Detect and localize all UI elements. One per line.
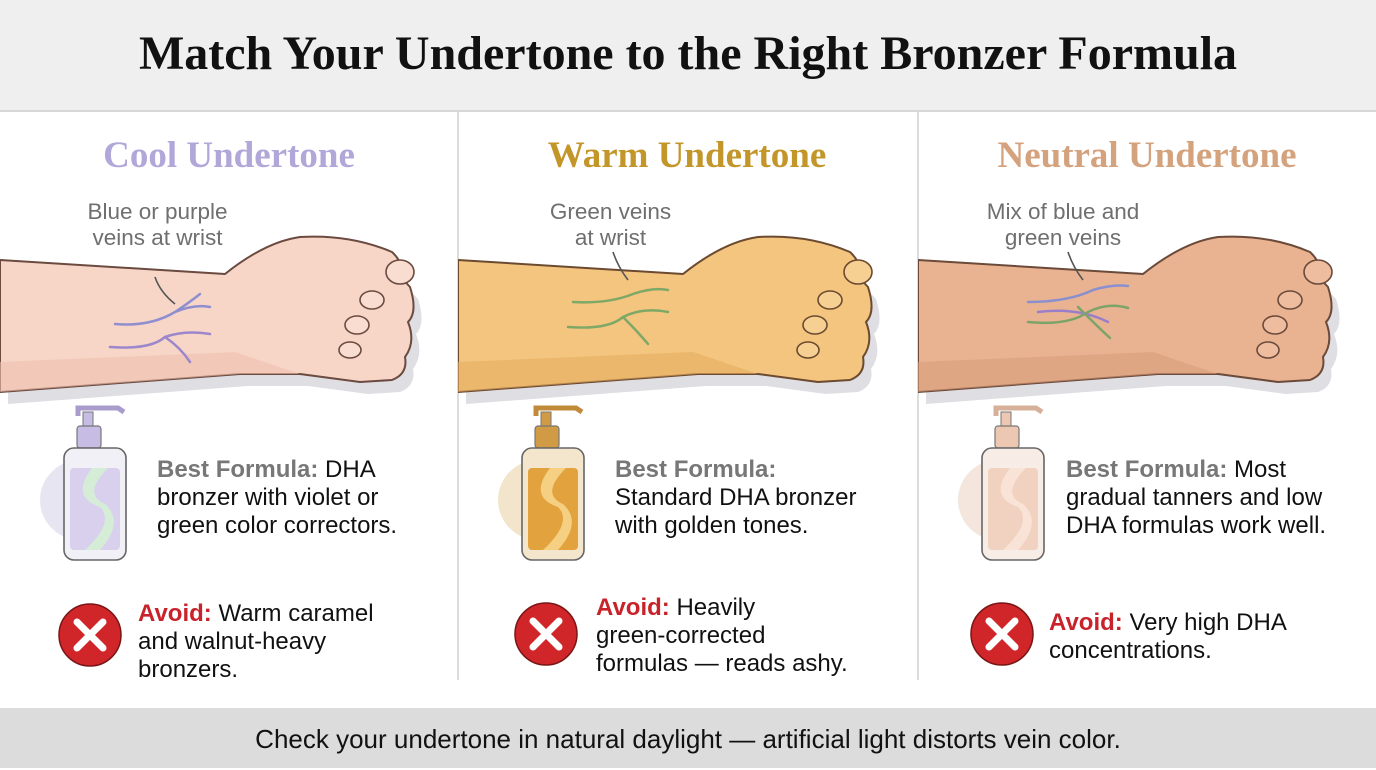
icon: avoid x — [970, 602, 1034, 666]
panel: cool — [0, 135, 422, 683]
icon: warm bottle — [498, 406, 585, 561]
icon: neutral bottle — [958, 406, 1045, 561]
heading: neutral: Neutral Undertone — [997, 135, 1297, 176]
text: neutral best formula: Best Formula: Most gradual tanners and low DHA formulas work well. — [1066, 456, 1326, 539]
illustration: neutral arm — [918, 236, 1340, 404]
text: warm best formula: Best Formula: — [615, 456, 776, 483]
note: neutral veins: Mix of blue and — [987, 199, 1139, 224]
heading: warm: Warm Undertone — [548, 135, 826, 176]
heading: cool: Cool Undertone — [103, 135, 355, 176]
note: cool veins: Blue or purple veins at wrist — [87, 199, 228, 250]
header — [0, 0, 1376, 112]
note: neutral veins — [987, 199, 1139, 250]
text: warm avoid: green-corrected — [596, 622, 765, 649]
note: warm veins: at wrist — [575, 225, 646, 250]
text: warm avoid: formulas — reads ashy. — [596, 650, 848, 677]
icon: cool bottle — [40, 406, 127, 561]
panel: warm — [458, 135, 880, 677]
text: warm avoid — [596, 594, 848, 677]
text: warm best formula — [615, 456, 856, 539]
text: cool avoid: Avoid: Warm caramel and walnut-heavy bronzers. — [138, 600, 374, 683]
note: warm veins — [550, 199, 671, 250]
text: cool best formula: Best Formula: DHA bronzer with violet or green color correctors. — [157, 456, 397, 539]
text: warm best formula: Standard DHA bronzer with golden tones. — [615, 484, 856, 539]
footer: Check your undertone in natural daylight — artificial light distorts vein color. — [255, 724, 1121, 754]
icon: avoid x — [514, 602, 578, 666]
icon: avoid x — [58, 603, 122, 667]
illustration: cool arm — [0, 236, 422, 404]
text: warm avoid: Avoid: Heavily — [596, 594, 755, 621]
illustration: warm arm — [458, 236, 880, 404]
text: neutral avoid: Avoid: Very high DHA concentrations. — [1049, 609, 1286, 664]
footer — [0, 708, 1376, 768]
note: warm veins: Green veins — [550, 199, 671, 224]
header: Match Your Undertone to the Right Bronzer Formula — [139, 27, 1237, 80]
note: neutral veins: green veins — [1005, 225, 1121, 250]
panel: neutral — [918, 135, 1340, 666]
